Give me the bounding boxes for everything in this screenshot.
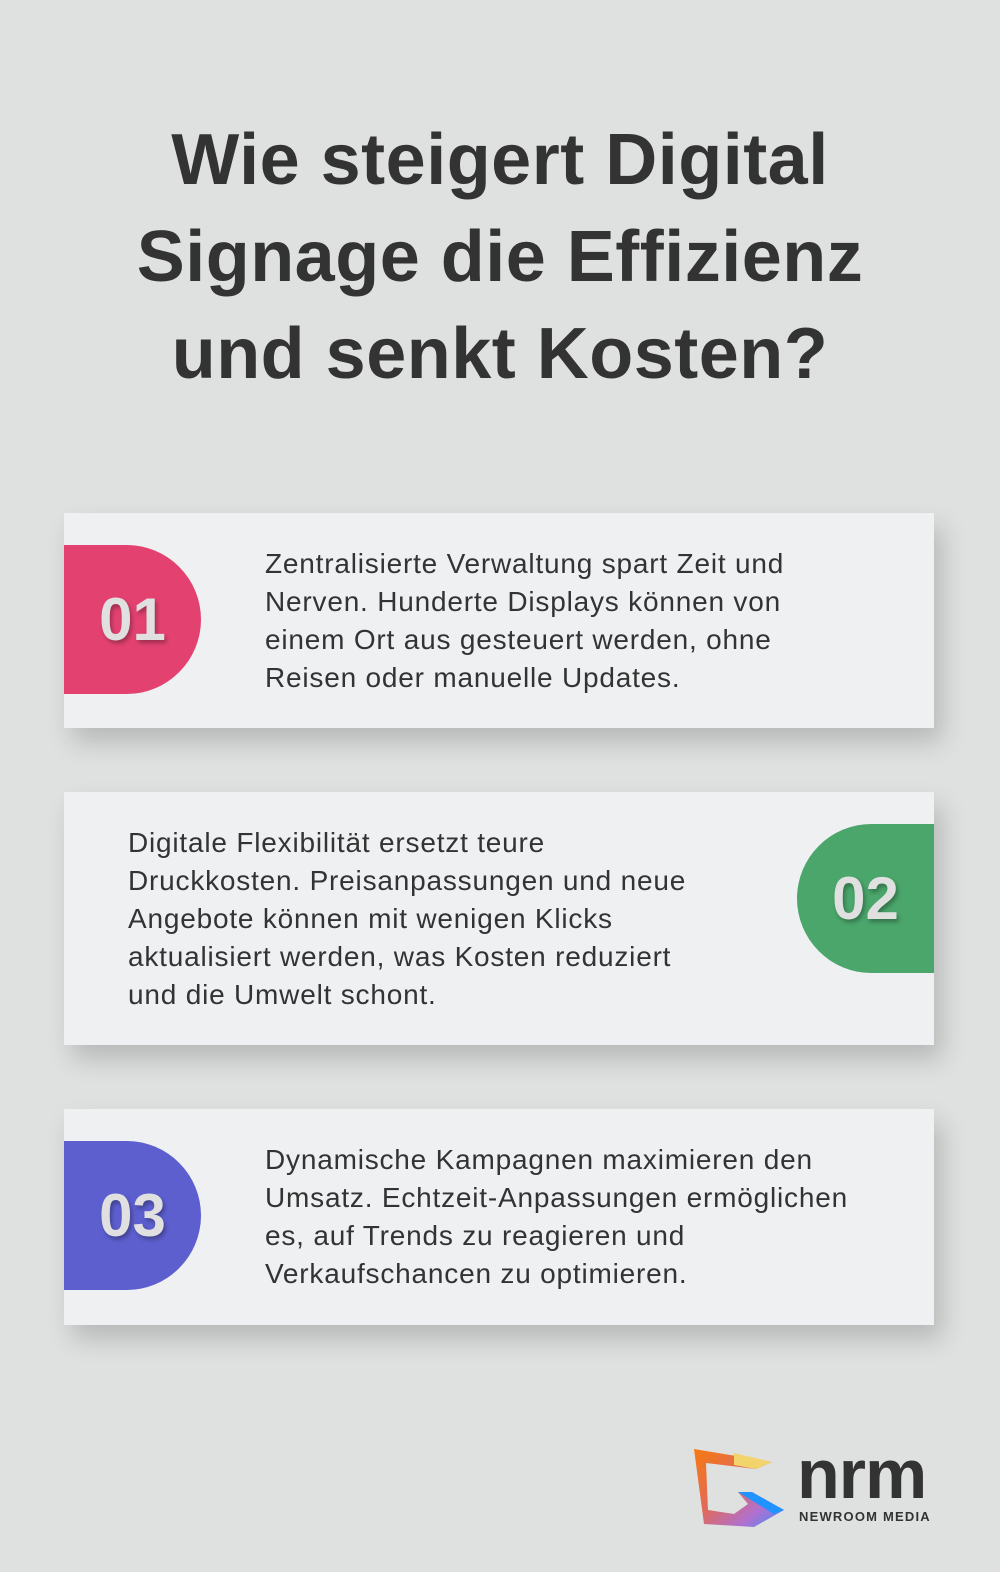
text 3: Dynamische Kampagnen maximieren den xyxy=(265,1144,813,1175)
title: Signage die Effizienz xyxy=(137,217,863,297)
panel: card 2 xyxy=(64,792,934,1045)
badge 03 xyxy=(64,1141,201,1290)
text 1: Reisen oder manuelle Updates. xyxy=(265,662,680,693)
text 2: Angebote können mit wenigen Klicks xyxy=(128,903,613,934)
text 1: Zentralisierte Verwaltung spart Zeit und xyxy=(265,548,784,579)
badge 02: 02 xyxy=(832,865,899,932)
text 2 xyxy=(128,827,686,1010)
badge 01 xyxy=(64,545,201,694)
title xyxy=(137,120,863,394)
text 2: Digitale Flexibilität ersetzt teure xyxy=(128,827,545,858)
panel: card 1 xyxy=(64,513,934,728)
logo: NEWROOM MEDIA xyxy=(799,1509,931,1524)
badge 02 xyxy=(797,824,934,973)
text 1 xyxy=(265,548,784,693)
text 3: es, auf Trends zu reagieren und xyxy=(265,1220,685,1251)
text 3: Umsatz. Echtzeit-Anpassungen ermöglichen xyxy=(265,1182,848,1213)
icon: logo mark xyxy=(694,1449,784,1527)
logo text: nrm xyxy=(797,1435,926,1513)
badge 01: 01 xyxy=(99,586,166,653)
text 2: aktualisiert werden, was Kosten reduziert xyxy=(128,941,671,972)
title: und senkt Kosten? xyxy=(172,314,828,394)
logo xyxy=(694,1435,931,1527)
text 3 xyxy=(265,1144,848,1289)
text 1: einem Ort aus gesteuert werden, ohne xyxy=(265,624,772,655)
panel: card 3 xyxy=(64,1109,934,1325)
text 2: Druckkosten. Preisanpassungen und neue xyxy=(128,865,686,896)
text 1: Nerven. Hunderte Displays können von xyxy=(265,586,781,617)
text 2: und die Umwelt schont. xyxy=(128,979,437,1010)
badge 03: 03 xyxy=(99,1182,166,1249)
title: Wie steigert Digital xyxy=(171,120,829,200)
text 3: Verkaufschancen zu optimieren. xyxy=(265,1258,687,1289)
